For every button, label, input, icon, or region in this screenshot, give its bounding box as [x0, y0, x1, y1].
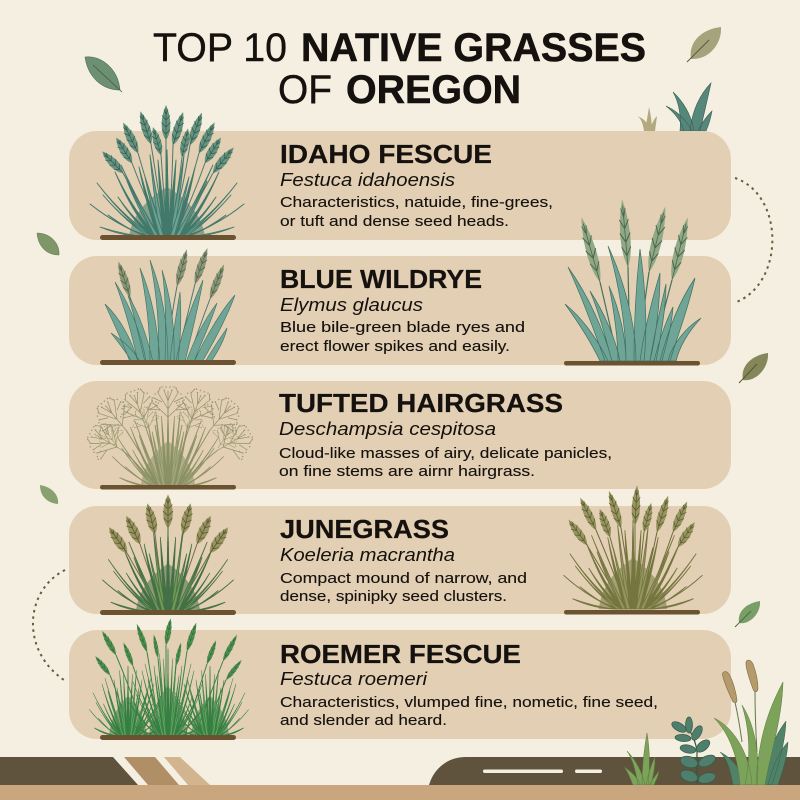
dashed arc right	[734, 178, 772, 303]
description: blue wildrye: erect flower spikes and easily.	[280, 338, 510, 355]
description: roemer fescue	[280, 694, 658, 729]
panel background	[69, 630, 731, 739]
description: roemer fescue: Characteristics, vlumped fine, nometic, fine seed,	[280, 694, 658, 711]
title: OREGON	[346, 68, 521, 112]
description: blue wildrye: Blue bile-green blade ryes and	[280, 319, 525, 336]
icon: blue wildrye grass	[100, 247, 236, 365]
title: NATIVE GRASSES	[301, 26, 646, 70]
description: tufted hairgrass	[279, 445, 612, 480]
panel: tufted hairgrass	[69, 381, 731, 490]
footer band right	[429, 757, 800, 785]
heading: idaho fescue: IDAHO FESCUE	[280, 139, 492, 169]
latin name: tufted hairgrass: Deschampsia cespitosa	[279, 419, 496, 439]
panel background	[69, 256, 731, 365]
description: idaho fescue	[280, 194, 553, 230]
dashed arc left	[33, 570, 65, 680]
icon: small grass bottom	[624, 733, 659, 785]
description: junegrass	[280, 570, 527, 605]
icon: leaf right middle	[739, 353, 768, 383]
description: tufted hairgrass: on fine stems are airnr hairgrass.	[279, 463, 535, 480]
icon: junegrass	[100, 494, 236, 615]
description: blue wildrye	[280, 319, 525, 355]
icon: cattails and reeds bottom right	[714, 660, 788, 785]
heading: tufted hairgrass: TUFTED HAIRGRASS	[279, 388, 563, 418]
footer band left	[0, 757, 210, 785]
icon: leaf right lower	[735, 601, 760, 627]
latin name: idaho fescue: Festuca idahoensis	[280, 170, 455, 190]
icon: leaf left upper	[37, 233, 59, 255]
icon: idaho fescue grass	[90, 105, 244, 240]
description: idaho fescue: Characteristics, natuide, fine-grees,	[280, 194, 553, 211]
description: junegrass: Compact mound of narrow, and	[280, 570, 527, 587]
heading: roemer fescue: ROEMER FESCUE	[280, 639, 521, 669]
title: OF	[278, 68, 332, 112]
description: idaho fescue: or tuft and dense seed heads.	[280, 213, 509, 230]
panel: roemer fescue	[69, 618, 731, 740]
icon: leafy sprig bottom	[670, 717, 717, 785]
latin name: junegrass: Koeleria macrantha	[280, 545, 455, 565]
icon: large blue wildrye right	[564, 199, 701, 366]
icon: leaf top right	[687, 27, 721, 62]
icon: tufted hairgrass	[81, 384, 259, 490]
title	[153, 26, 646, 112]
panel background	[69, 131, 731, 240]
icon: large junegrass right	[564, 485, 702, 614]
panel: junegrass	[69, 494, 731, 615]
latin name: blue wildrye: Elymus glaucus	[280, 295, 423, 315]
panel: blue wildrye	[69, 247, 731, 365]
heading: junegrass: JUNEGRASS	[280, 514, 449, 544]
latin name: roemer fescue: Festuca roemeri	[280, 669, 428, 689]
description: roemer fescue: and slender ad heard.	[280, 712, 447, 729]
description: junegrass: dense, spinipky seed clusters.	[280, 588, 507, 605]
title: TOP 10	[153, 26, 287, 70]
heading: blue wildrye: BLUE WILDRYE	[280, 264, 482, 294]
panel: idaho fescue	[69, 105, 731, 240]
icon: roemer fescue grass	[90, 618, 248, 740]
panel background	[69, 506, 731, 614]
small grass above first panel	[637, 83, 712, 131]
footer ground strip	[0, 785, 800, 800]
icon: leaf top left	[85, 57, 122, 92]
description: tufted hairgrass: Cloud-like masses of airy, delicate panicles,	[279, 445, 612, 462]
icon: leaf left lower	[40, 485, 58, 504]
panel background	[69, 381, 731, 489]
